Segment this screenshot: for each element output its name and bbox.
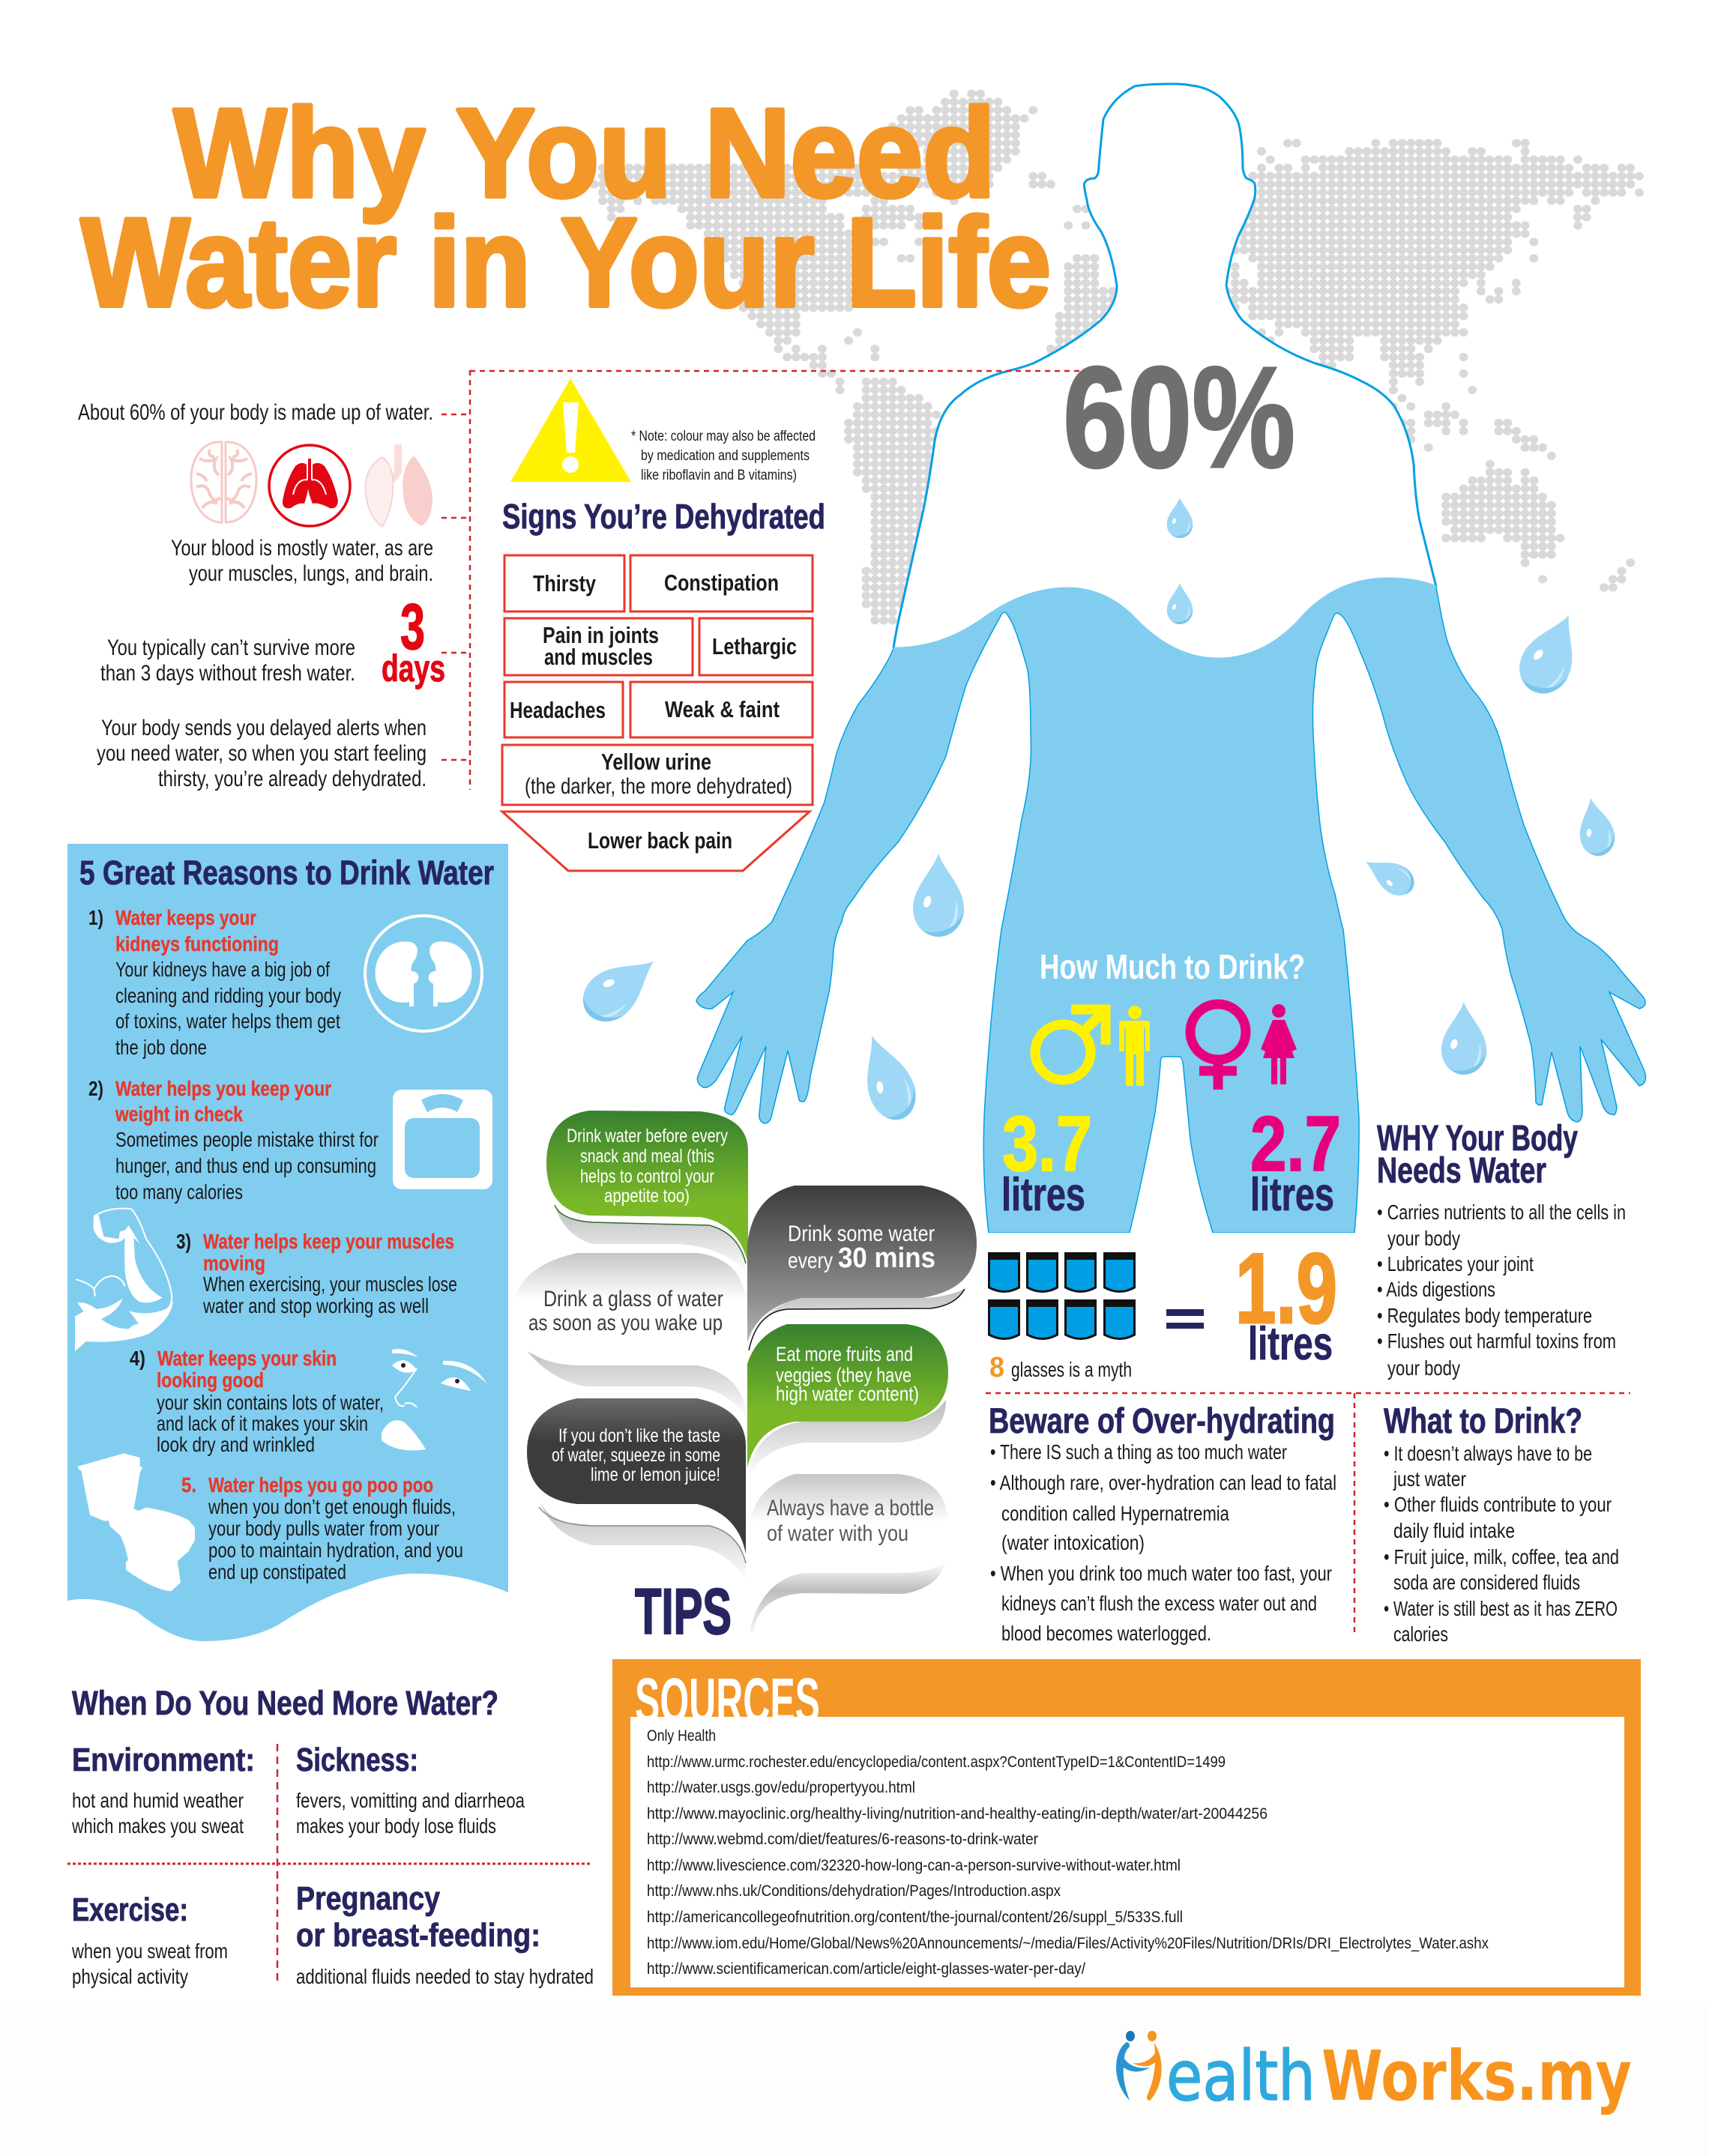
reason 5: poo to maintain hydration, and you (208, 1539, 463, 1562)
dehydration symptom boxes: Yellow urine (601, 749, 711, 775)
sickness: Sickness: (296, 1742, 418, 1778)
bubble edge lines (555, 1205, 746, 1263)
text: blood is mostly water: Your blood is mostly water, as are (171, 536, 433, 561)
tip: every 30 mins: every (788, 1248, 833, 1273)
source list: http://americancollegeofnutrition.org/content/the-journal/content/26/suppl_5/533S.full (647, 1909, 1183, 1926)
note on urine colour (631, 429, 816, 483)
tip: glass when you wake up (513, 1253, 746, 1409)
exercise: Exercise: (72, 1891, 188, 1928)
tip: glass when you wake up: Drink a glass of water (543, 1287, 723, 1311)
source list: http://www.mayoclinic.org/healthy-living/nutrition-and-healthy-eating/in-depth/water/art-20044256 (647, 1805, 1268, 1823)
icon: female symbol (1190, 1004, 1246, 1090)
environment: which makes you sweat (71, 1814, 244, 1838)
what to drink: soda are considered fluids (1393, 1571, 1580, 1594)
sickness: fevers, vomitting and diarrheoa (296, 1789, 525, 1812)
icon: toilet (78, 1453, 195, 1591)
panel: sources: SOURCES (635, 1665, 820, 1736)
dotted world map (585, 94, 1640, 620)
text: survive 3 days (100, 635, 355, 686)
source list: http://water.usgs.gov/edu/propertyyou.html (647, 1779, 915, 1796)
bubble shadows (523, 1205, 965, 1581)
beware of over-hydrating: (water intoxication) (1001, 1531, 1145, 1554)
source list: http://www.scientificamerican.com/article/eight-glasses-water-per-day/ (647, 1960, 1085, 1978)
tip: every 30 mins (747, 1186, 977, 1343)
beware of over-hydrating: • When you drink too much water too fast, your (990, 1562, 1332, 1585)
environment (71, 1742, 255, 1838)
icon: male symbol (1035, 1005, 1110, 1080)
text: delayed alerts (97, 716, 427, 791)
title: Water in Your Life (81, 192, 1051, 333)
reason 4: look dry and wrinkled (157, 1433, 315, 1456)
dehydration symptom boxes: Headaches (510, 697, 606, 723)
why your body needs water: WHY Your Body (1377, 1119, 1578, 1159)
why your body needs water: Needs Water (1377, 1151, 1546, 1191)
icon: lungs in circle (269, 445, 350, 526)
when do you need more water: When Do You Need More Water? (72, 1684, 498, 1722)
tip: fruits and veggies: Eat more fruits and (776, 1343, 913, 1365)
dehydration symptom boxes (502, 555, 813, 871)
tip: lime or lemon (527, 1398, 746, 1554)
why your body needs water: your body (1387, 1356, 1460, 1380)
text: delayed alerts: you need water, so when you start feeling (97, 741, 427, 766)
tip: every 30 mins: 30 mins (838, 1242, 935, 1274)
beware of over-hydrating: • There IS such a thing as too much water (990, 1440, 1287, 1464)
8 glasses is a myth: 8 (989, 1352, 1004, 1383)
icon: anatomical lungs (365, 444, 432, 527)
callout: 3 days: days (382, 647, 445, 689)
source list: http://www.webmd.com/diet/features/6-reasons-to-drink-water (647, 1831, 1038, 1848)
source list (647, 1727, 1489, 1978)
reason 2: too many calories (115, 1180, 243, 1204)
reason 3 (176, 1230, 457, 1317)
reason 1: Water keeps your (115, 906, 256, 929)
what to drink: calories (1393, 1622, 1448, 1646)
text: survive 3 days: than 3 days without fresh water. (100, 661, 355, 686)
text: blood is mostly water (171, 536, 433, 586)
reason 2: 2) (88, 1077, 103, 1100)
male intake 3.7 litres: litres (1001, 1169, 1085, 1221)
what to drink: • Fruit juice, milk, coffee, tea and (1384, 1545, 1619, 1568)
panel: tips speech bubbles (513, 1111, 977, 1648)
reason 1: kidneys functioning (115, 932, 279, 955)
tip: before every snack: appetite too) (604, 1186, 690, 1207)
text: delayed alerts: Your body sends you delayed alerts when (101, 716, 427, 740)
reason 1: Your kidneys have a big job of (115, 958, 330, 981)
environment: hot and humid weather (72, 1789, 244, 1812)
sickness (296, 1742, 525, 1838)
8 glasses is a myth: glasses is a myth (1011, 1358, 1132, 1381)
reason 5: your body pulls water from your (208, 1517, 439, 1540)
icon: man figure (1119, 1006, 1150, 1086)
reason 4: 4) (130, 1347, 145, 1370)
pregnancy: or breast-feeding: (296, 1917, 540, 1954)
how much to drink heading: How Much to Drink? (1040, 947, 1305, 986)
reason 5: 5. (181, 1473, 196, 1497)
tip: before every snack: Drink water before every (567, 1126, 728, 1147)
tip: fruits and veggies: veggies (they have (776, 1364, 911, 1386)
tip: bottle of water: of water with you (767, 1521, 908, 1546)
reason 4: your skin contains lots of water, (157, 1391, 384, 1414)
1.9 litres: 1.9 (1235, 1233, 1337, 1344)
logo: HealthWorks.my: ealth (1166, 2036, 1315, 2116)
environment: Environment: (72, 1742, 255, 1778)
sickness: makes your body lose fluids (296, 1814, 496, 1838)
what to drink: • It doesn’t always have to be (1384, 1442, 1592, 1465)
reason 3: When exercising, your muscles lose (203, 1272, 457, 1296)
tip: lime or lemon: of water, squeeze in some (552, 1445, 720, 1466)
dehydration symptom boxes: Constipation (664, 570, 779, 596)
heading: signs you're dehydrated: Signs You’re Dehydrated (502, 497, 825, 536)
tip: lime or lemon: lime or lemon juice! (591, 1464, 720, 1485)
tip: lime or lemon: If you don’t like the taste (558, 1425, 720, 1446)
dehydration symptom boxes: Weak & faint (665, 696, 780, 722)
dehydration symptom boxes: Lower back pain (588, 827, 732, 854)
text: blood is mostly water: your muscles, lungs, and brain. (189, 561, 433, 586)
beware of over-hydrating: • Although rare, over-hydration can lead to fatal (990, 1471, 1336, 1494)
reason 4 (130, 1347, 384, 1456)
dehydration symptom boxes: Pain in joints (543, 622, 659, 648)
male intake 3.7 litres: 3.7 (1002, 1101, 1092, 1188)
why your body needs water: • Carries nutrients to all the cells in (1377, 1201, 1626, 1224)
reason 4: Water keeps your skin (157, 1347, 337, 1370)
callout: 3 days: 3 (400, 591, 425, 663)
equals sign (1166, 1309, 1204, 1329)
8 glasses is a myth (989, 1352, 1132, 1383)
pregnancy: Pregnancy (296, 1880, 440, 1917)
beware of over-hydrating: blood becomes waterlogged. (1001, 1622, 1211, 1645)
icon: eight glasses (988, 1252, 1136, 1340)
icon: kidneys (365, 916, 482, 1031)
reason 2 (88, 1077, 379, 1204)
source list: http://www.iom.edu/Home/Global/News%20Announcements/~/media/Files/Activity%20Files/Nutrition/DRIs/DRI_Electrolytes_Water.ashx (647, 1935, 1489, 1952)
when do you need more water (67, 1684, 594, 1988)
reason 4: and lack of it makes your skin (157, 1412, 368, 1435)
why your body needs water: your body (1387, 1227, 1460, 1250)
reason 2: Water helps you keep your (115, 1077, 331, 1100)
tip: before every snack: snack and meal (this (580, 1146, 714, 1167)
panel: 5 great reasons (67, 844, 508, 1641)
text: body is 60% water: About 60% of your body is made up of water. (78, 400, 433, 425)
what to drink: • Water is still best as it has ZERO (1384, 1597, 1618, 1620)
reason 3: moving (203, 1251, 265, 1275)
reason 3: Water helps keep your muscles (203, 1230, 454, 1253)
icon: weighing scale (393, 1090, 492, 1189)
dehydration symptom boxes: Thirsty (533, 570, 597, 597)
reason 5: Water helps you go poo poo (208, 1473, 433, 1497)
exercise: physical activity (72, 1965, 188, 1988)
why your body needs water: • Flushes out harmful toxins from (1377, 1329, 1616, 1353)
reason 3: water and stop working as well (202, 1294, 429, 1317)
title: Why You Need (174, 82, 995, 223)
source list: Only Health (647, 1727, 716, 1745)
logo: HealthWorks.my (1116, 2031, 1632, 2116)
why your body needs water: • Aids digestions (1377, 1278, 1495, 1301)
dehydration symptom boxes: and muscles (544, 644, 653, 670)
panel: sources (612, 1659, 1641, 1996)
body outline: head and shoulders (893, 84, 1436, 648)
logo: HealthWorks.my: Works.my (1321, 2036, 1632, 2116)
what to drink: just water (1393, 1467, 1466, 1491)
note on urine colour: like riboflavin and B vitamins) (641, 468, 797, 483)
what to drink: What to Drink? (1384, 1401, 1582, 1440)
logo icon: two people (1116, 2031, 1162, 2101)
reason 1: cleaning and ridding your body (115, 984, 341, 1007)
source list: http://www.livescience.com/32320-how-long-can-a-person-survive-without-water.html (647, 1857, 1181, 1874)
callout: 3 days (382, 591, 445, 689)
text: survive 3 days: You typically can’t survive more (107, 635, 355, 660)
title (81, 82, 1051, 333)
tip: bottle of water (749, 1474, 948, 1634)
tip: glass when you wake up: as soon as you wake up (528, 1311, 723, 1335)
tip: every 30 mins: Drink some water (788, 1222, 935, 1246)
text: delayed alerts: thirsty, you’re already dehydrated. (158, 767, 427, 791)
water drops (573, 498, 1618, 1126)
exercise (71, 1891, 228, 1988)
why your body needs water: • Lubricates your joint (1377, 1252, 1534, 1275)
why your body needs water (1377, 1119, 1626, 1380)
reason 1: of toxins, water helps them get (115, 1009, 340, 1033)
tip: fruits and veggies (747, 1324, 948, 1467)
dashed connector lines (441, 370, 1092, 790)
reason 2: hunger, and thus end up consuming (115, 1154, 376, 1177)
tip: before every snack: helps to control your (580, 1166, 714, 1187)
pregnancy: additional fluids needed to stay hydrated (296, 1965, 594, 1988)
beware of over-hydrating: condition called Hypernatremia (1001, 1502, 1229, 1525)
beware of over-hydrating: Beware of Over-hydrating (989, 1401, 1335, 1440)
reason 4: looking good (157, 1368, 264, 1392)
reason 5: when you don’t get enough fluids, (208, 1495, 456, 1518)
reason 1: the job done (115, 1036, 207, 1059)
body water fill with arms, hands and legs (696, 579, 1645, 1233)
source list: http://www.nhs.uk/Conditions/dehydration/Pages/Introduction.aspx (647, 1882, 1061, 1900)
reason 5 (181, 1473, 463, 1583)
dehydration symptom boxes: (the darker, the more dehydrated) (525, 774, 792, 799)
male intake 3.7 litres (1001, 1101, 1092, 1221)
icon: brain (191, 442, 256, 522)
source list: http://www.urmc.rochester.edu/encyclopedia/content.aspx?ContentTypeID=1&ContentID=1499 (647, 1754, 1226, 1771)
tips heading: TIPS (635, 1576, 732, 1648)
why your body needs water: • Regulates body temperature (1377, 1304, 1592, 1327)
icon: warning triangle (510, 378, 631, 482)
what to drink: • Other fluids contribute to your (1384, 1493, 1612, 1516)
reason 1 (88, 906, 341, 1059)
1.9 litres (1235, 1233, 1337, 1370)
pregnancy (296, 1880, 594, 1988)
what to drink: daily fluid intake (1393, 1519, 1515, 1542)
female intake 2.7 litres: 2.7 (1250, 1101, 1341, 1188)
note on urine colour: * Note: colour may also be affected (631, 429, 816, 444)
60% heading: 60% (1063, 336, 1295, 498)
tip: before every snack (546, 1111, 748, 1263)
note on urine colour: by medication and supplements (641, 448, 810, 464)
reason 3: 3) (176, 1230, 191, 1253)
reason 2: weight in check (115, 1102, 243, 1126)
exercise: when you sweat from (71, 1939, 228, 1963)
icon: woman figure (1261, 1004, 1297, 1084)
reason 1: 1) (88, 906, 103, 929)
page background tint (0, 2007, 1709, 2156)
reason 2: Sometimes people mistake thirst for (115, 1128, 379, 1151)
female intake 2.7 litres: litres (1250, 1169, 1334, 1221)
icon: face (382, 1349, 487, 1451)
dashed dividers right (986, 1393, 1630, 1637)
white bubble band (750, 1562, 946, 1632)
what to drink (1384, 1401, 1619, 1646)
1.9 litres: litres (1248, 1318, 1333, 1370)
beware of over-hydrating: kidneys can’t flush the excess water out and (1001, 1592, 1317, 1615)
tip: bottle of water: Always have a bottle (767, 1496, 934, 1521)
female intake 2.7 litres (1250, 1101, 1341, 1221)
panel heading: 5 Great Reasons to Drink Water (79, 854, 494, 892)
icon: flexed arm (75, 1209, 173, 1351)
dehydration symptom boxes: Lethargic (712, 633, 797, 659)
reason 5: end up constipated (208, 1560, 346, 1583)
tip: fruits and veggies: high water content) (776, 1383, 919, 1405)
beware of over-hydrating (989, 1401, 1336, 1645)
